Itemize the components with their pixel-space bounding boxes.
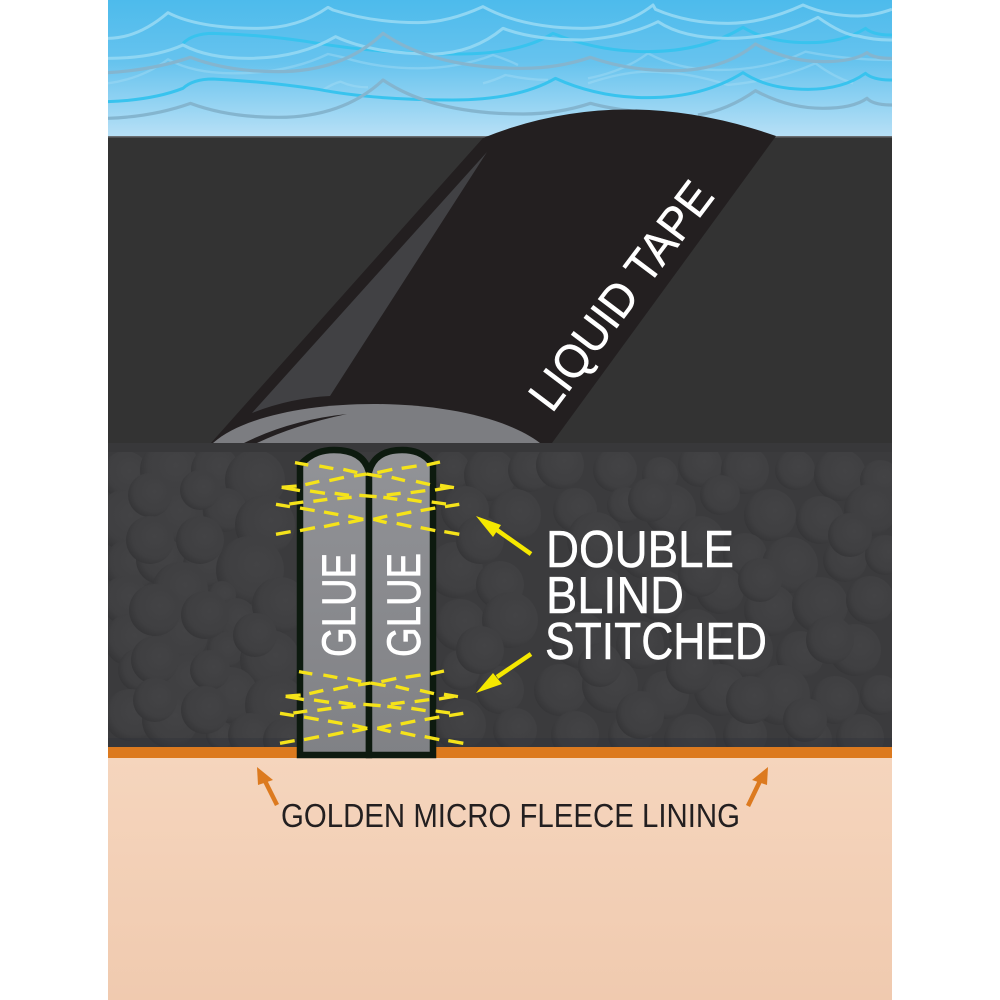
panel: golden micro fleece lining strip [108, 747, 892, 758]
lower stitches [280, 671, 463, 743]
arrow: lower stitch pointer [476, 654, 531, 693]
panel: water sky [108, 0, 892, 137]
panel: outer dark shell [108, 136, 892, 443]
tape highlight [252, 152, 487, 413]
panel: neoprene foam layer [95, 440, 905, 766]
label: liquid tape: LIQUID TAPE [518, 171, 724, 420]
glue bead bump [213, 404, 540, 443]
panel: liquid tape [211, 109, 776, 443]
arrow: upper stitch pointer [476, 516, 531, 554]
upper stitches [276, 462, 459, 534]
right glue strip: GLUE [377, 553, 430, 657]
heading: double blind stitched: STITCHED [545, 613, 767, 671]
left glue strip [300, 450, 369, 755]
heading: double blind stitched: DOUBLE [546, 521, 734, 579]
heading: double blind stitched: BLIND [546, 567, 684, 625]
arrow: fleece right [748, 767, 768, 806]
glue seam [300, 450, 433, 755]
bump crease [244, 414, 347, 443]
heading: double blind stitched [545, 521, 767, 671]
waves [108, 5, 892, 118]
right glue strip [369, 450, 433, 755]
arrow: fleece left [257, 767, 277, 805]
panel: skin [108, 758, 892, 1000]
left glue strip: GLUE [312, 553, 365, 657]
label: golden micro fleece lining: GOLDEN MICRO FLEECE LINING [281, 797, 740, 834]
